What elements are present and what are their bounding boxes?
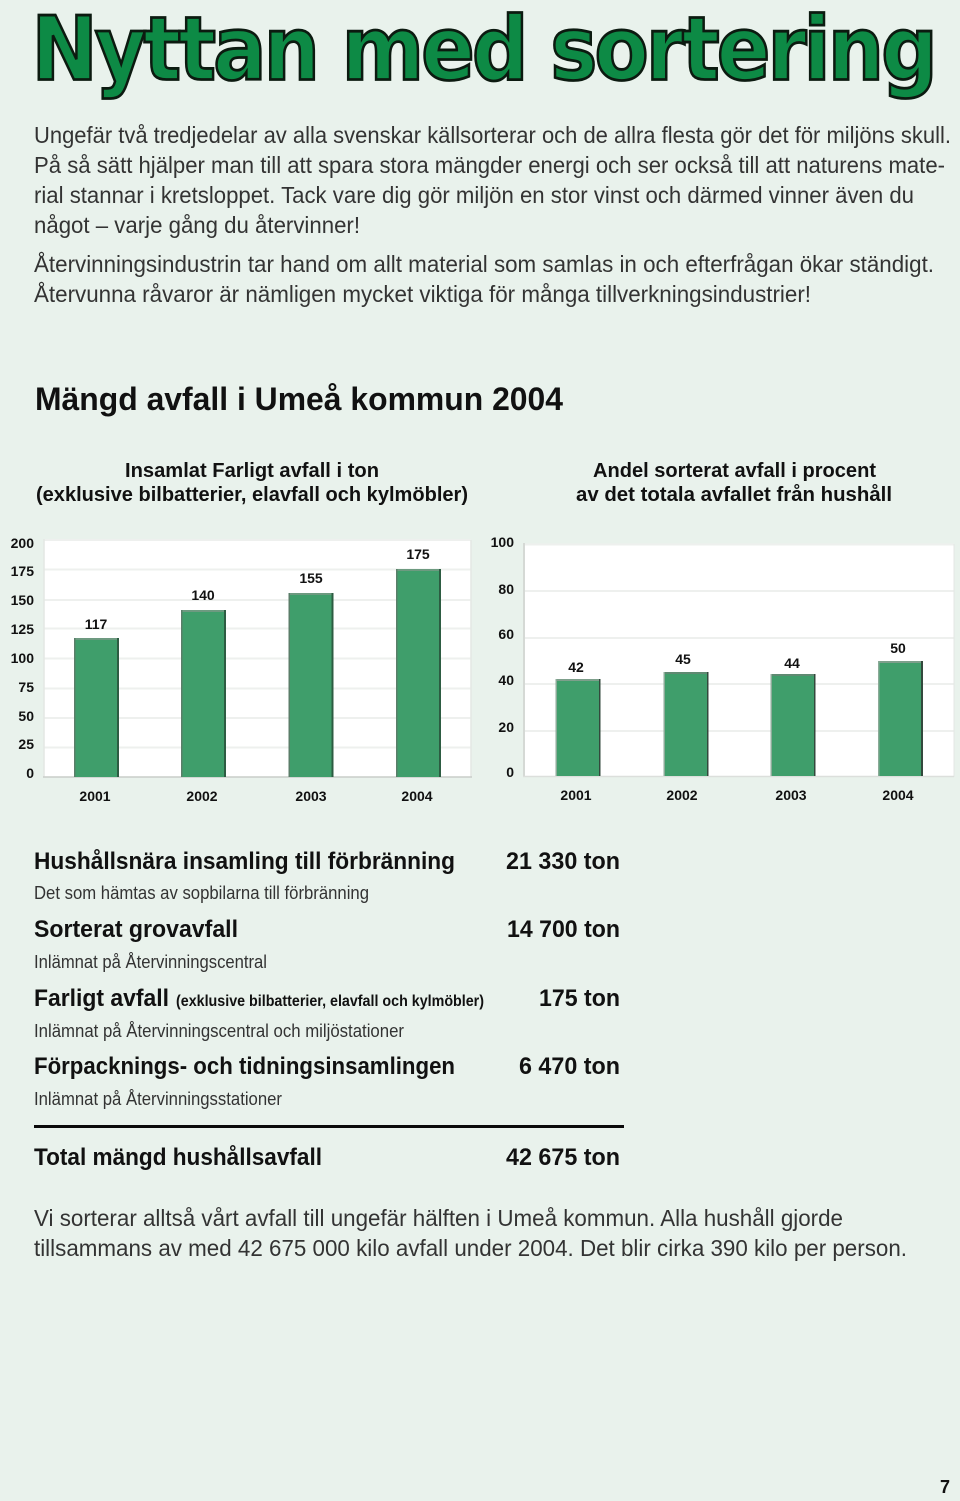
bar chart: sorted waste percent [491, 534, 954, 803]
closing paragraph [34, 1205, 907, 1261]
title: Nyttan med sortering [32, 0, 938, 101]
right chart title [576, 460, 892, 506]
intro paragraph 2: Återvinningsindustrin tar hand om allt material som samlas in och efterfrågan ökar ständigt. [34, 250, 934, 277]
row: sorted bulky waste: Inlämnat på Återvinningscentral [34, 952, 267, 972]
bar 2002: 140: 140 [191, 587, 215, 603]
row: total [34, 1144, 620, 1171]
row: household collection: Det som hämtas av sopbilarna till förbränning [34, 883, 369, 903]
row: hazardous waste [34, 985, 620, 1041]
row: hazardous waste: Farligt avfall [34, 985, 169, 1012]
intro paragraph 1: något – varje gång du återvinner! [34, 212, 360, 238]
bar 2002: 45: 45 [675, 651, 691, 667]
bar 2002: 140 [181, 587, 226, 804]
y axis labels: 125 [11, 621, 34, 637]
y axis labels: 50 [18, 708, 34, 724]
bar 2004: 50: 50 [890, 640, 906, 656]
bar 2001: 42: 42 [568, 659, 584, 675]
y axis labels: 75 [18, 679, 34, 695]
closing paragraph: tillsammans av med 42 675 000 kilo avfall under 2004. Det blir cirka 390 kilo per person. [34, 1235, 907, 1261]
bar 2004: 175 [396, 546, 441, 804]
closing paragraph: Vi sorterar alltså vårt avfall till ungefär hälften i Umeå kommun. Alla hushåll gjorde [34, 1205, 843, 1231]
y axis labels: 150 [11, 592, 34, 608]
row: packaging and newspapers: Inlämnat på Återvinningsstationer [34, 1089, 282, 1109]
page number: 7 [940, 1477, 950, 1497]
intro paragraph 2: Återvunna råvaror är nämligen mycket viktiga för många tillverkningsindustrier! [34, 280, 811, 307]
y axis labels: 0 [26, 765, 34, 781]
row: packaging and newspapers [34, 1053, 620, 1109]
bar 2001: 42: 2001 [560, 787, 592, 803]
bar 2004: 50: 2004 [882, 787, 914, 803]
row: total: 42 675 ton [506, 1144, 620, 1171]
bar 2003: 155: 2003 [295, 788, 327, 804]
row: hazardous waste: (exklusive bilbatterier, elavfall och kylmöbler) [176, 993, 484, 1010]
y axis labels: 100 [491, 534, 514, 550]
y axis labels: 200 [11, 535, 34, 551]
bar 2004: 50 [878, 640, 923, 803]
bar 2002: 45: 2002 [666, 787, 698, 803]
section heading: Mängd avfall i Umeå kommun 2004 [35, 381, 563, 417]
y axis labels: 80 [498, 581, 514, 597]
row: household collection [34, 848, 620, 903]
y axis labels: 25 [18, 736, 34, 752]
waste table [34, 848, 624, 1171]
bar 2001: 117 [74, 616, 119, 804]
row: sorted bulky waste: 14 700 ton [507, 916, 620, 943]
bar 2004: 175: 175 [406, 546, 430, 562]
row: household collection: 21 330 ton [506, 848, 620, 875]
y axis labels [491, 534, 514, 780]
left chart title: Insamlat Farligt avfall i ton [125, 460, 379, 482]
bar 2001: 42 [556, 659, 600, 803]
bar 2003: 44: 2003 [775, 787, 807, 803]
y axis labels: 175 [11, 563, 34, 579]
row: packaging and newspapers: Förpacknings- och tidningsinsamlingen [34, 1053, 455, 1080]
bar 2001: 117: 117 [85, 616, 108, 632]
bar chart: hazardous waste in tons [11, 535, 472, 804]
y axis labels: 60 [498, 626, 514, 642]
left chart title: (exklusive bilbatterier, elavfall och kylmöbler) [36, 484, 468, 506]
right chart title: Andel sorterat avfall i procent [593, 460, 876, 482]
y axis labels: 20 [498, 719, 514, 735]
row: hazardous waste: 175 ton [539, 985, 620, 1012]
bar 2001: 117: 2001 [79, 788, 111, 804]
bar 2003: 44 [770, 655, 816, 803]
row: hazardous waste: Inlämnat på Återvinningscentral och miljöstationer [34, 1021, 404, 1041]
row: sorted bulky waste: Sorterat grovavfall [34, 916, 238, 943]
row: household collection: Hushållsnära insamling till förbränning [34, 848, 455, 875]
y axis labels: 0 [506, 764, 514, 780]
y axis labels: 100 [11, 650, 34, 666]
y axis labels: 40 [498, 672, 514, 688]
bar 2004: 175: 2004 [401, 788, 433, 804]
intro paragraph 2 [34, 250, 934, 307]
bar 2003: 155: 155 [299, 570, 323, 586]
bar 2002: 45 [664, 651, 708, 803]
bar 2003: 44: 44 [784, 655, 800, 671]
row: packaging and newspapers: 6 470 ton [519, 1053, 620, 1080]
bar 2003: 155 [288, 570, 334, 804]
row: total: Total mängd hushållsavfall [34, 1144, 322, 1171]
intro paragraph 1: rial stannar i kretsloppet. Tack vare dig gör miljön en stor vinst och därmed vinner även du [34, 182, 914, 208]
bar 2002: 140: 2002 [186, 788, 218, 804]
intro paragraph 1 [34, 122, 951, 238]
intro paragraph 1: På så sätt hjälper man till att spara stora mängder energi och ser också till att naturens mate- [34, 152, 945, 178]
left chart title [36, 460, 468, 506]
row: sorted bulky waste [34, 916, 620, 972]
y axis labels [11, 535, 34, 781]
right chart title: av det totala avfallet från hushåll [576, 483, 892, 506]
